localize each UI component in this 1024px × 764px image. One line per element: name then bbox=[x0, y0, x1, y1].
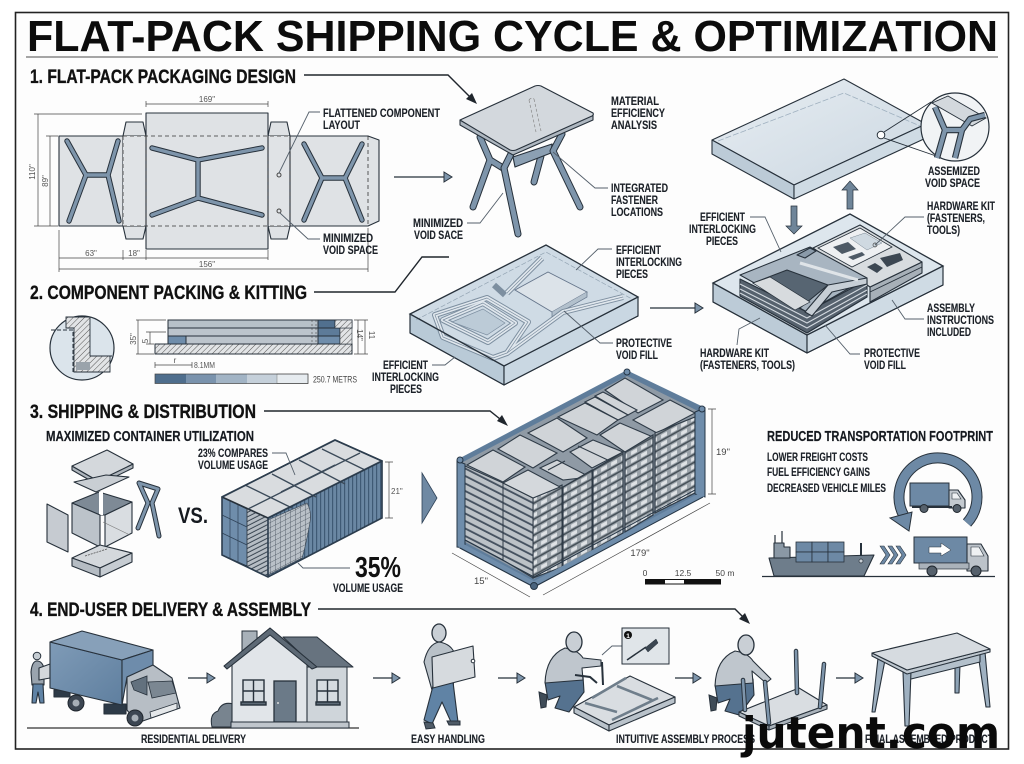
dimensions: dieline: 110" bbox=[28, 164, 37, 180]
icon: house bbox=[211, 628, 353, 728]
callout: step 1 screwdriver: 1 bbox=[626, 633, 630, 640]
label: hardware kit bottom bbox=[700, 318, 795, 372]
label: efficient interlocking pieces kit: PIECES bbox=[706, 236, 738, 248]
dimensions: large container bbox=[452, 409, 730, 597]
heading: section 2: 2. COMPONENT PACKING & KITTING bbox=[30, 282, 307, 304]
icon: kitted box with stacked parts bbox=[713, 214, 943, 353]
label: protective void fill kit bbox=[825, 325, 920, 372]
label: minimized void space bbox=[277, 209, 378, 257]
subheading: maximized container utilization: MAXIMIZED CONTAINER UTILIZATION bbox=[46, 429, 254, 445]
label: efficient interlocking pieces top bbox=[576, 245, 682, 281]
dimensions: dieline: 89" bbox=[41, 175, 50, 187]
label: protective void fill: VOID FILL bbox=[616, 350, 658, 362]
title: FLAT-PACK SHIPPING CYCLE & OPTIMIZATION bbox=[27, 13, 998, 61]
arrow: section 3 to container bbox=[264, 411, 508, 426]
scale bar: colour steps bbox=[155, 374, 357, 384]
arrow: box to kit bbox=[650, 303, 703, 313]
stacks: upper tiles bbox=[467, 378, 695, 482]
label: efficient interlocking pieces bottom: PIECES bbox=[390, 384, 422, 396]
dimensions: dieline: 63" bbox=[85, 249, 97, 258]
arrow: handling to assembly bbox=[498, 673, 525, 683]
label: hardware kit top: HARDWARE KIT bbox=[927, 201, 995, 213]
label: assembly instructions included: ASSEMBLY bbox=[927, 303, 975, 315]
tray stack: hardware and instructions bbox=[813, 225, 922, 302]
heading: section 3: 3. SHIPPING & DISTRIBUTION bbox=[30, 401, 256, 423]
icon: person assembling tray bbox=[539, 628, 675, 731]
icon: circular arrow bbox=[890, 458, 977, 531]
label: efficient interlocking pieces bottom: INTERLOCKING bbox=[372, 372, 439, 384]
stacks: striped faces bbox=[465, 466, 533, 578]
icon: exploded box bbox=[47, 450, 159, 577]
label: efficient interlocking pieces kit bbox=[689, 212, 781, 252]
icon: joint section magnifier bbox=[50, 316, 114, 380]
worker bbox=[31, 652, 50, 703]
label: efficient interlocking pieces kit: EFFICIENT bbox=[700, 212, 745, 224]
heading: section 4: 4. END-USER DELIVERY & ASSEMBLY bbox=[30, 599, 311, 621]
label: integrated fastener locations: FASTENER bbox=[611, 195, 659, 207]
label: hardware kit top: (FASTENERS, bbox=[927, 213, 985, 225]
icon: lid box with magnifier bbox=[712, 79, 989, 199]
arrow: section 4 to assembly bbox=[318, 609, 750, 624]
label: 23% compares volume usage: VOLUME USAGE bbox=[198, 460, 268, 472]
label: hardware kit top: TOOLS) bbox=[927, 225, 960, 237]
label: integrated fastener locations: LOCATIONS bbox=[611, 207, 663, 219]
frame: rails and posts bbox=[460, 372, 627, 460]
label: material efficiency analysis: ANALYSIS bbox=[611, 120, 657, 132]
dimensions: stack: 8.1MM bbox=[194, 361, 215, 370]
dimensions: large container: 179" bbox=[630, 548, 650, 559]
arrow: flip to final bbox=[836, 673, 863, 683]
label: efficient interlocking pieces bottom: EFFICIENT bbox=[383, 360, 428, 372]
label: protective void fill kit: PROTECTIVE bbox=[864, 348, 920, 360]
dimensions: stack bbox=[129, 320, 376, 370]
left component bbox=[67, 141, 119, 221]
label: minimized void space: VOID SPACE bbox=[323, 245, 378, 257]
label: minimized void sace: VOID SACE bbox=[414, 230, 463, 242]
heading: section 1: 1. FLAT-PACK PACKAGING DESIGN bbox=[30, 66, 296, 88]
frame stack bbox=[740, 247, 867, 333]
icon: person carrying flat pack bbox=[424, 624, 475, 729]
stacks: brick faces bbox=[533, 417, 695, 578]
label: assemized void space: ASSEMIZED bbox=[928, 166, 980, 178]
label: hardware kit top bbox=[875, 201, 995, 245]
scale bar: metres: 0 bbox=[643, 568, 648, 578]
dimensions: stack: 5 bbox=[141, 338, 150, 343]
label: material efficiency analysis: MATERIAL bbox=[611, 96, 659, 108]
dimension: 21": 21" bbox=[391, 487, 403, 496]
label: minimized void sace: MINIMIZED bbox=[413, 218, 463, 230]
scale bar: colour steps: 250.7 METRS bbox=[313, 374, 357, 384]
icon: assembled table bbox=[460, 86, 593, 234]
label: residential delivery: RESIDENTIAL DELIVERY bbox=[141, 734, 246, 746]
scale bar: metres: 12.5 bbox=[675, 568, 692, 578]
windows bbox=[241, 680, 340, 705]
label: efficient interlocking pieces kit: INTERLOCKING bbox=[689, 224, 756, 236]
dimensions: dieline bbox=[28, 95, 368, 272]
arrow: house to handling bbox=[373, 673, 400, 683]
arrow: up out of box bbox=[842, 181, 858, 209]
watermark: jutent.com: jutent.com bbox=[740, 708, 1000, 759]
arrow: assembly to flip bbox=[675, 673, 701, 683]
arrow: comparison triangle bbox=[422, 473, 437, 523]
dimensions: dieline: 169" bbox=[199, 95, 215, 104]
magnifier: void space detail bbox=[921, 93, 989, 161]
label: assembly instructions included bbox=[892, 300, 994, 339]
panel: reduced transportation footprint: DECREASED VEHICLE MILES bbox=[767, 483, 886, 495]
ground line bbox=[27, 727, 359, 729]
dimensions: stack: 11 bbox=[367, 331, 376, 340]
icon: chair frame bbox=[138, 483, 159, 536]
right component bbox=[304, 144, 362, 220]
label: protective void fill bbox=[564, 311, 672, 362]
icon: large packed container bbox=[452, 369, 730, 597]
dimension: 21" bbox=[385, 462, 403, 518]
stat: 35% volume usage: 35% bbox=[355, 552, 401, 584]
label: 23% compares volume usage bbox=[198, 448, 295, 475]
diagram: stacked layers cross-section bbox=[129, 320, 376, 370]
label: intuitive assembly process: INTUITIVE ASSEMBLY PROCESS bbox=[616, 734, 755, 746]
label: efficient interlocking pieces bottom bbox=[372, 357, 455, 396]
centre component bbox=[152, 148, 262, 215]
arrow: down into box bbox=[786, 206, 802, 234]
dimensions: stack: r bbox=[174, 356, 177, 365]
label: flattened component layout bbox=[277, 108, 440, 177]
label: easy handling: EASY HANDLING bbox=[411, 734, 485, 746]
icon: delivery truck bbox=[914, 537, 988, 576]
dimensions: stack: 14" bbox=[355, 329, 364, 341]
label: flattened component layout: LAYOUT bbox=[323, 120, 360, 132]
label: assembly instructions included: INSTRUCTIONS bbox=[927, 315, 994, 327]
dimensions: large container: 19" bbox=[716, 447, 730, 458]
icon: translucent packed box bbox=[410, 245, 638, 385]
connector: section 2 to box bbox=[314, 257, 449, 292]
scale bar: metres bbox=[643, 568, 734, 584]
label: assembly instructions included: INCLUDED bbox=[927, 327, 971, 339]
label: integrated fastener locations: INTEGRATED bbox=[611, 183, 668, 195]
label: flattened component layout: FLATTENED COMPONENT bbox=[323, 108, 440, 120]
text: VS.: VS. bbox=[178, 503, 208, 528]
stat: 35% volume usage: VOLUME USAGE bbox=[333, 583, 403, 595]
label: protective void fill: PROTECTIVE bbox=[616, 338, 672, 350]
scale bar: metres: 50 m bbox=[716, 568, 734, 578]
label: integrated fastener locations bbox=[553, 152, 668, 219]
label: material efficiency analysis: EFFICIENCY bbox=[611, 108, 665, 120]
stat: 35% volume usage bbox=[298, 552, 403, 595]
dieline: flattened packaging layout bbox=[59, 113, 379, 249]
label: protective void fill kit: VOID FILL bbox=[864, 360, 906, 372]
label: efficient interlocking pieces top: INTERLOCKING bbox=[616, 257, 682, 269]
label: hardware kit bottom: (FASTENERS, TOOLS) bbox=[700, 360, 795, 372]
label: minimized void space: MINIMIZED bbox=[323, 233, 373, 245]
dimensions: dieline: 18" bbox=[128, 249, 140, 258]
label: assemized void space: VOID SPACE bbox=[925, 178, 980, 190]
dimensions: large container: 15" bbox=[474, 576, 488, 587]
dimensions: stack: 35" bbox=[129, 333, 138, 345]
icon: small truck bbox=[910, 483, 965, 512]
panel: reduced transportation footprint: LOWER FREIGHT COSTS bbox=[767, 452, 868, 464]
icon: chevrons bbox=[880, 546, 906, 564]
label: hardware kit bottom: HARDWARE KIT bbox=[700, 348, 769, 360]
icon: delivery truck and worker bbox=[27, 631, 359, 728]
label: minimized void sace bbox=[413, 193, 503, 242]
arrow: section 1 to table bbox=[304, 75, 477, 104]
label: efficient interlocking pieces top: PIECES bbox=[616, 269, 648, 281]
label: assemized void space bbox=[925, 166, 980, 190]
arrow: dieline to table bbox=[394, 172, 452, 182]
icon: finished table bbox=[872, 633, 990, 726]
truck cab bbox=[127, 665, 180, 726]
icon: cargo ship bbox=[769, 531, 874, 576]
dimensions: dieline: 156" bbox=[199, 260, 215, 269]
panel: reduced transportation footprint bbox=[762, 429, 995, 576]
arrow: truck to house bbox=[188, 673, 215, 683]
label: efficient interlocking pieces top: EFFICIENT bbox=[616, 245, 661, 257]
panel: reduced transportation footprint: FUEL EFFICIENCY GAINS bbox=[767, 467, 870, 479]
label: 23% compares volume usage: 23% COMPARES bbox=[198, 448, 268, 460]
icon: small container bbox=[222, 440, 403, 577]
label: material efficiency analysis bbox=[611, 96, 665, 132]
icon: person fitting table legs bbox=[709, 635, 827, 730]
